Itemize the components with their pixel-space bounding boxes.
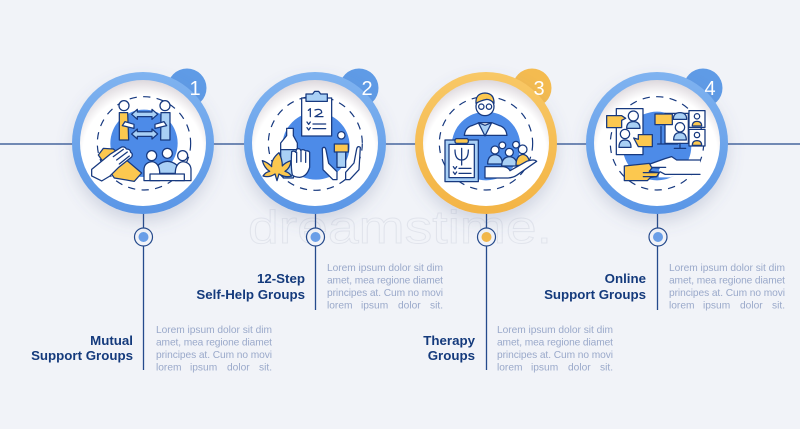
body 1: lorem xyxy=(156,362,181,374)
body 3: sit. xyxy=(600,362,613,374)
body 4: dolor xyxy=(740,300,763,312)
step 1 xyxy=(31,68,272,374)
icon 2 xyxy=(262,91,362,190)
body 1: sit. xyxy=(259,362,272,374)
body 1: dolor xyxy=(227,362,250,374)
connector line 1 xyxy=(142,210,144,370)
icon 3 xyxy=(439,93,537,190)
ring 1 xyxy=(72,72,214,214)
node 2 xyxy=(306,228,324,246)
body 4 xyxy=(669,263,785,312)
body 4: sit. xyxy=(772,300,785,312)
body 3: principes at. Cum no movi xyxy=(497,350,613,361)
title 4: Online xyxy=(605,271,646,286)
body 2: lorem xyxy=(327,300,352,312)
body 4: ipsum xyxy=(703,300,730,312)
body 2: ipsum xyxy=(361,300,388,312)
title 3: Therapy xyxy=(423,333,476,348)
body 2 xyxy=(327,263,443,312)
title 4: Support Groups xyxy=(544,287,646,302)
node 3 xyxy=(478,228,496,246)
icon 4 xyxy=(607,97,705,190)
watermark: dreamstime. xyxy=(248,201,552,253)
body 2: amet, mea regione diamet xyxy=(327,276,443,286)
node 1 xyxy=(134,228,152,246)
title 1: Mutual xyxy=(90,333,133,348)
body 2: sit. xyxy=(430,300,443,312)
badge 2 xyxy=(340,68,378,108)
body 1 xyxy=(156,325,272,374)
body 2: dolor xyxy=(398,300,421,312)
title 3: Groups xyxy=(428,348,475,363)
body 3: ipsum xyxy=(531,362,558,374)
body 1: Lorem ipsum dolor sit dim xyxy=(156,325,272,336)
badge number 4: 4 xyxy=(704,78,716,100)
ring 3 xyxy=(415,72,557,214)
timeline line xyxy=(0,143,800,145)
body 2: principes at. Cum no movi xyxy=(327,288,443,299)
body 1: amet, mea regione diamet xyxy=(156,338,272,348)
connector line 3 xyxy=(486,210,488,370)
body 1: ipsum xyxy=(190,362,217,374)
body 1: principes at. Cum no movi xyxy=(156,350,272,361)
body 3: amet, mea regione diamet xyxy=(497,338,613,348)
icon 1 xyxy=(92,97,191,190)
body 4: Lorem ipsum dolor sit dim xyxy=(669,263,785,274)
connector line 2 xyxy=(314,210,316,310)
ring 4 xyxy=(586,72,728,214)
badge 3 xyxy=(512,68,552,108)
title 2: Self-Help Groups xyxy=(196,287,305,302)
body 4: principes at. Cum no movi xyxy=(669,288,785,299)
step 4 xyxy=(544,68,785,312)
body 4: amet, mea regione diamet xyxy=(669,276,785,286)
ring 2 xyxy=(244,72,386,214)
badge 4 xyxy=(684,68,722,108)
body 3: Lorem ipsum dolor sit dim xyxy=(497,325,613,336)
node 4 xyxy=(649,228,667,246)
badge 1 xyxy=(168,68,206,108)
step 2 xyxy=(196,68,443,312)
body 2: Lorem ipsum dolor sit dim xyxy=(327,263,443,274)
title 1: Support Groups xyxy=(31,348,133,363)
badge number 3: 3 xyxy=(533,78,545,100)
body 3 xyxy=(497,325,613,374)
body 3: dolor xyxy=(568,362,591,374)
step 3 xyxy=(415,68,613,374)
body 3: lorem xyxy=(497,362,522,374)
badge number 1: 1 xyxy=(189,78,201,100)
title 2: 12-Step xyxy=(257,271,305,286)
body 4: lorem xyxy=(669,300,694,312)
badge number 2: 2 xyxy=(361,78,373,100)
connector line 4 xyxy=(656,210,658,310)
